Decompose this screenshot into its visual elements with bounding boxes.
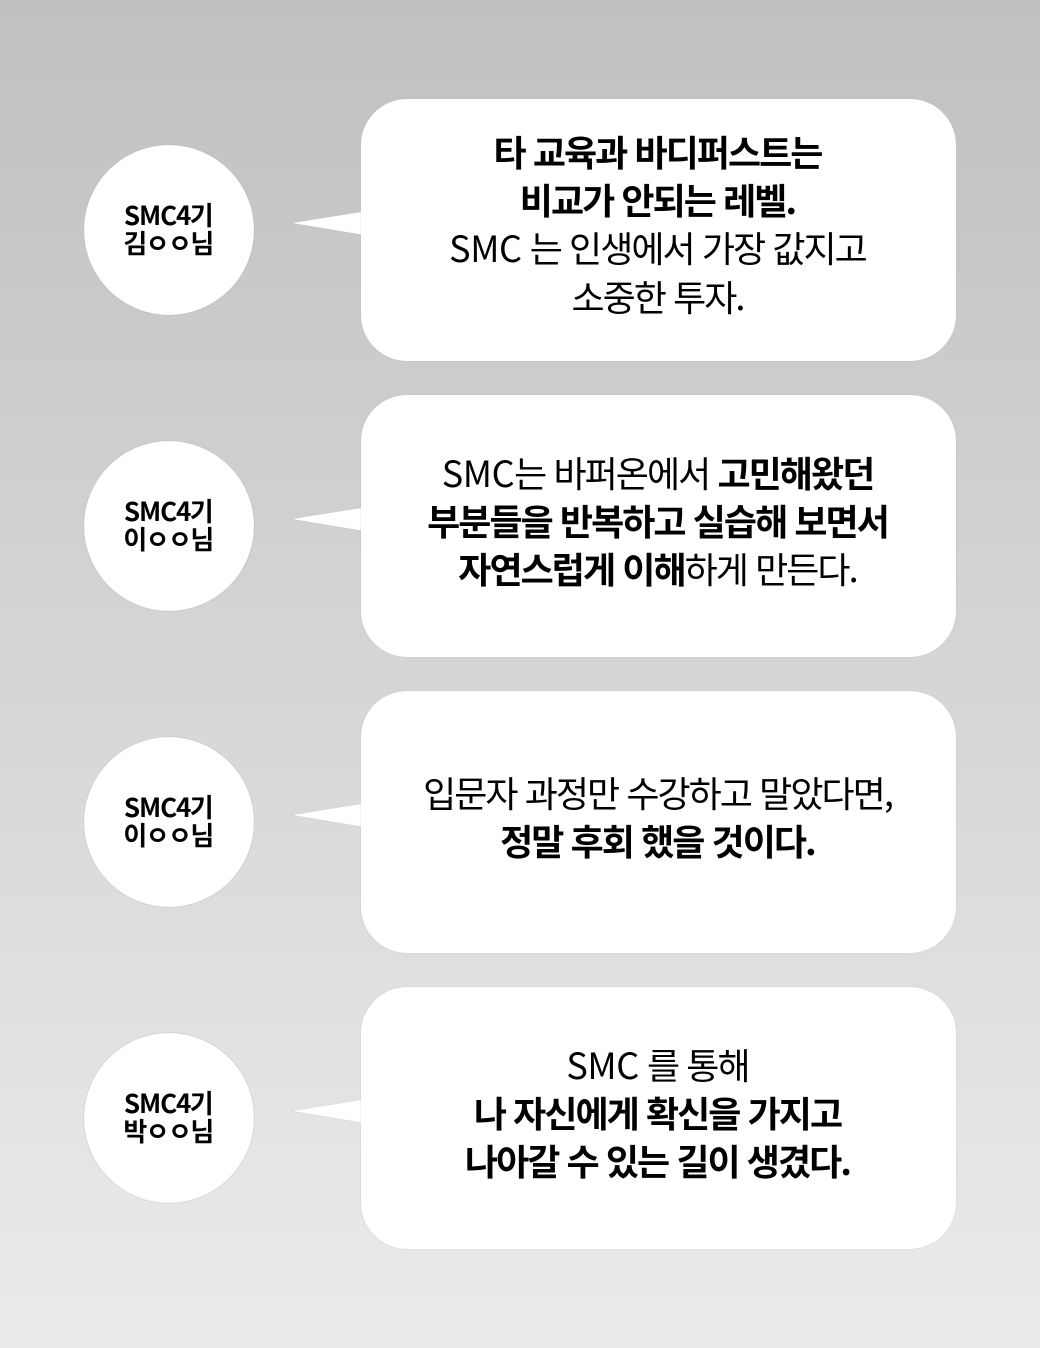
speech bubble 1 (361, 99, 956, 361)
avatar: SMC 4기 이ㅇㅇ님 (84, 737, 254, 907)
avatar: SMC 4기 이ㅇㅇ님: SMC4기 (124, 788, 212, 825)
avatar: SMC 4기 박ㅇㅇ님 (84, 1033, 254, 1203)
avatar: SMC 4기 김ㅇㅇ님: 김ㅇㅇ님 (123, 224, 213, 261)
speech bubble 2: 자연스럽게 이해하게 만든다. (458, 542, 857, 594)
speech bubble 4: 나 자신에게 확신을 가지고 (474, 1086, 841, 1138)
avatar: SMC 4기 이ㅇㅇ님: SMC4기 (124, 492, 212, 529)
avatar: SMC 4기 이ㅇㅇ님: 이ㅇㅇ님 (123, 816, 213, 853)
avatar: SMC 4기 이ㅇㅇ님 (84, 441, 254, 611)
speech bubble 4: 나아갈 수 있는 길이 생겼다. (465, 1134, 850, 1186)
speech bubble 3: 입문자 과정만 수강하고 말았다면, (423, 766, 892, 818)
bubble tail 2 (291, 508, 361, 530)
speech bubble 1: SMC 는 인생에서 가장 값지고 (449, 221, 866, 273)
speech bubble 1: 소중한 투자. (571, 270, 744, 322)
speech bubble 1: 비교가 안되는 레벨. (520, 173, 795, 225)
avatar: SMC 4기 김ㅇㅇ님 (84, 145, 254, 315)
speech bubble 3: 정말 후회 했을 것이다. (500, 814, 815, 866)
bubble tail 1 (291, 212, 361, 234)
speech bubble 3 (361, 691, 956, 953)
avatar: SMC 4기 이ㅇㅇ님: 이ㅇㅇ님 (123, 520, 213, 557)
speech bubble 2: SMC는 바퍼온에서 고민해왔던 (442, 446, 873, 498)
speech bubble 4 (361, 987, 956, 1249)
avatar: SMC 4기 김ㅇㅇ님: SMC4기 (124, 196, 212, 233)
speech bubble 2 (361, 395, 956, 657)
speech bubble 2: 부분들을 반복하고 실습해 보면서 (427, 494, 888, 546)
speech bubble 1: 타 교육과 바디퍼스트는 (494, 125, 821, 177)
avatar: SMC 4기 박ㅇㅇ님: 박ㅇㅇ님 (123, 1112, 213, 1149)
bubble tail 4 (291, 1100, 361, 1122)
bubble tail 3 (291, 804, 361, 826)
speech bubble 4: SMC 를 통해 (566, 1038, 749, 1090)
avatar: SMC 4기 박ㅇㅇ님: SMC4기 (124, 1084, 212, 1121)
